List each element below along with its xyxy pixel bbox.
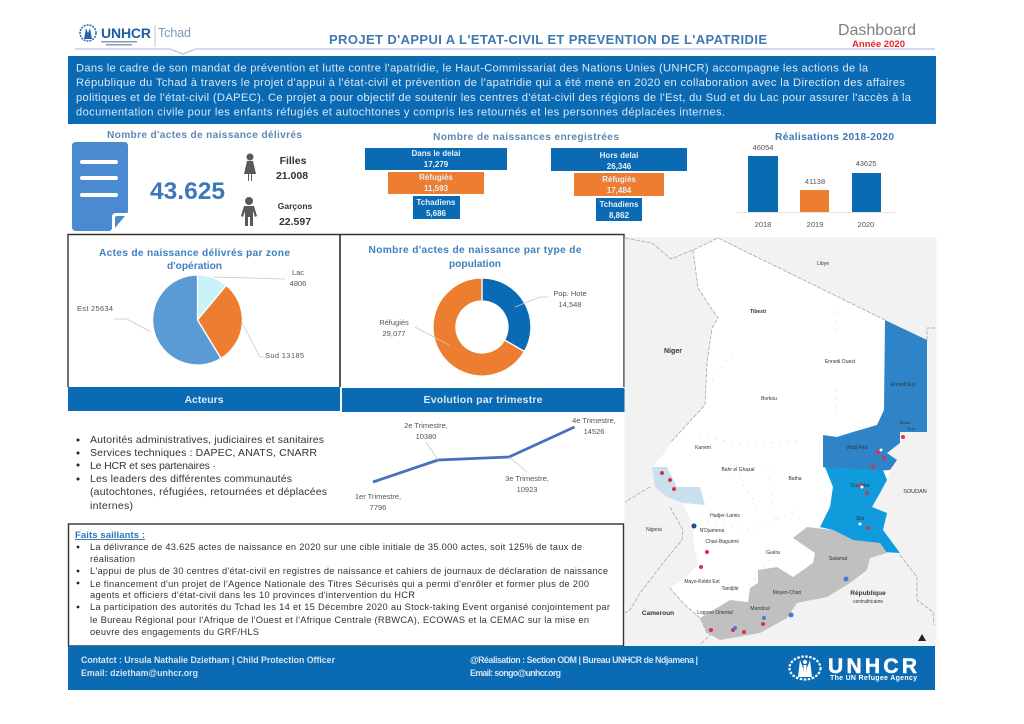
line chart: évolution par trimestre: 2e Trimestre, — [404, 421, 448, 430]
map labels: Niger — [664, 348, 682, 355]
list: acteurs: Autorités administratives, judiciaires et sanitaires — [90, 434, 324, 446]
panel: faits saillants: réalisation — [90, 554, 135, 564]
heading band: acteurs — [68, 387, 340, 411]
footer contact — [81, 655, 336, 678]
funnel: hors délai: 17,484 — [607, 186, 632, 195]
list: acteurs: Les leaders des différentes communautés — [90, 473, 292, 485]
funnel: dans le délai: 5,686 — [426, 209, 447, 218]
funnel: hors délai: 8,862 — [609, 211, 630, 220]
funnel: hors délai: Réfugiés — [602, 175, 636, 184]
region: Lac — [652, 467, 705, 505]
map labels: Bahr el Ghazal — [721, 467, 755, 473]
map labels: Libye — [817, 261, 829, 267]
dashboard label: Année 2020 — [852, 39, 905, 50]
panel: faits saillants: Le financement d'un projet de l'Agence Nationale des Titres Sécurisés qui a permi d'enrôler et former plus de 200 — [90, 579, 589, 589]
line chart: évolution par trimestre: 1er Trimestre, — [355, 492, 401, 501]
map labels: Chari-Baguirmi — [705, 539, 739, 545]
pie labels: Lac — [292, 268, 304, 277]
line chart: évolution par trimestre: 7796 — [370, 503, 386, 512]
donut chart: population — [433, 278, 531, 376]
footer credit: Email: songo@unhcr.org — [470, 668, 561, 678]
footer logo: The UN Refugee Agency — [830, 675, 917, 682]
funnel: dans le délai: Réfugiés — [419, 173, 453, 182]
header logo: UNHCR Tchad: UNHCR — [101, 25, 151, 41]
header rule — [75, 49, 935, 54]
donut labels: Pop. Hote — [553, 289, 587, 298]
header logo: UNHCR Tchad — [80, 25, 191, 47]
map labels: Batha — [788, 476, 802, 482]
heading: zones: Actes de naissance délivrés par zone — [99, 248, 290, 259]
map labels: centrafricaine — [853, 599, 883, 605]
heading: population: Nombre d'actes de naissance par type de — [368, 245, 582, 256]
map labels — [642, 261, 927, 617]
funnel: hors délai — [551, 148, 687, 221]
map labels: Guéra — [766, 550, 780, 556]
map labels: Kanem — [695, 445, 711, 451]
funnel: hors délai: Tchadiens — [600, 200, 639, 209]
line chart: évolution par trimestre — [355, 416, 616, 512]
pie leader lines — [114, 277, 285, 357]
footer logo — [790, 655, 917, 682]
pie labels — [77, 268, 306, 360]
panel: population chart — [340, 234, 624, 387]
boys count — [278, 201, 313, 228]
map labels: Sila — [856, 516, 864, 522]
line chart: évolution par trimestre: 14526 — [584, 427, 604, 436]
map labels: Salamat — [829, 556, 848, 562]
funnel: hors délai: 26,346 — [607, 162, 632, 171]
girls count: 21.008 — [276, 170, 308, 182]
footer contact: Email: dzietham@unhcr.org — [81, 668, 198, 678]
pie chart: zones — [153, 275, 242, 365]
heading: réalisations: Réalisations 2018-2020 — [775, 132, 894, 143]
girls count: Filles — [280, 155, 307, 167]
bar chart: réalisations 2018-2020: 2018 — [755, 220, 771, 229]
map labels: Borkou — [761, 396, 777, 402]
funnel: dans le délai: Tchadiens — [417, 198, 456, 207]
panel: faits saillants: oeuvre des engagements du GRF/HLS — [90, 627, 259, 637]
outer borders — [625, 238, 936, 645]
map labels: Mayo-Kebbi Est — [684, 579, 720, 585]
bar chart: réalisations 2018-2020: 43625 — [856, 159, 876, 168]
line chart: évolution par trimestre: 3e Trimestre, — [505, 474, 549, 483]
map labels: République — [850, 590, 886, 597]
bar chart: réalisations 2018-2020: 46054 — [753, 143, 773, 152]
map labels: Ennedi Est — [891, 382, 916, 388]
line chart: évolution par trimestre: 10380 — [416, 432, 436, 441]
map markers — [660, 435, 905, 634]
map labels: Nigeria — [646, 527, 662, 533]
map labels: Hadjer-Lamis — [710, 513, 740, 519]
line chart: évolution par trimestre: 4e Trimestre, — [572, 416, 616, 425]
map labels: Cameroun — [642, 610, 674, 617]
list: acteurs — [76, 434, 327, 512]
bar chart: réalisations 2018-2020: 2020 — [858, 220, 874, 229]
heading band: evolution — [342, 388, 625, 412]
region: Borkou-Ennedi-Wadi Fira — [823, 320, 927, 472]
map labels: Tibesti — [750, 309, 767, 315]
bar chart: réalisations 2018-2020 — [737, 143, 895, 229]
panel: faits saillants: Faits saillants : — [75, 530, 145, 541]
donut labels: 29,077 — [383, 329, 405, 338]
footer credit: @Réalisation : Section ODM | Bureau UNHCR de Ndjamena | — [470, 655, 698, 665]
icon: document — [72, 142, 128, 231]
funnel: dans le délai: 17,279 — [424, 160, 449, 169]
line chart: évolution par trimestre: 10923 — [517, 485, 537, 494]
panel: introduction — [68, 56, 936, 124]
map labels: Wadi Fira — [846, 445, 868, 451]
panel: introduction: Dans le cadre de son mandat de prévention et lutte contre l'apatridie, le Haut-Commissariat des Nations Unies (UNHCR) accompagne les actions de la — [76, 62, 869, 74]
panel: zones chart — [68, 234, 340, 387]
footer contact: Contatct : Ursula Nathalie Dzietham | Child Protection Officer — [81, 655, 336, 665]
panel: introduction: République du Tchad à travers le projet d'appui à l'état-civil et prévention de l'apatridie qui a été mené en 2020 en collaboration avec la Direction des affaires — [76, 77, 905, 89]
heading: zones — [99, 248, 290, 272]
donut leader lines — [415, 297, 548, 345]
header logo: UNHCR Tchad: Tchad — [158, 26, 191, 40]
panel: faits saillants: La délivrance de 43.625 actes de naissance en 2020 sur une cible initiale de 35.000 actes, soit 125% de taux de — [90, 542, 582, 552]
panel: faits saillants: agents et officiers d'état-civil dans les 10 provinces d'intervention du HCR — [90, 590, 415, 600]
dashboard label — [838, 22, 916, 50]
region: Sud — [700, 527, 887, 640]
list: acteurs: Le HCR et ses partenaires · — [90, 460, 216, 472]
total birth certificates: 43.625 — [150, 178, 225, 205]
map labels: Ouaddaï — [850, 483, 870, 489]
footer logo: UNHCR — [828, 655, 917, 678]
pie labels: Est 25634 — [77, 304, 113, 313]
map labels: Logone Oriental — [697, 610, 733, 616]
girls count — [276, 155, 308, 182]
icon: north arrow — [918, 634, 926, 641]
list: acteurs: Services techniques : DAPEC, ANATS, CNARR — [90, 447, 317, 459]
map labels: SOUDAN — [903, 489, 927, 495]
panel: faits saillants: L'appui de plus de 30 centres d'état-civil en registres de naissance et cahiers de journaux de déclaration de naissance — [90, 566, 608, 576]
heading band: acteurs: Acteurs — [184, 394, 224, 406]
funnel: hors délai: Hors delai — [600, 151, 638, 160]
icon: boy — [241, 197, 257, 226]
funnel: dans le délai: 11,593 — [424, 184, 449, 193]
boys count: 22.597 — [279, 216, 311, 228]
donut labels — [379, 289, 587, 338]
map labels: Bahaï — [900, 420, 911, 425]
pie labels: 4806 — [290, 279, 306, 288]
dashboard label: Dashboard — [838, 22, 916, 39]
icon: girl — [244, 154, 256, 181]
heading: zones: d'opération — [167, 261, 222, 272]
region: Ouaddai-Sila — [820, 467, 900, 553]
heading: population — [368, 245, 582, 270]
boys count: Garçons — [278, 201, 313, 211]
funnel: dans le délai — [365, 148, 507, 219]
panel: faits saillants — [68, 524, 624, 646]
panel: introduction: politiques et de l'état-civil (DAPEC). Ce projet a pour objectif de soutenir les centres d'état-civil des régions de l'Est, du Sud et du Lac pour assurer l'accès à la — [76, 92, 912, 104]
map labels: Ennedi Ouest — [825, 359, 856, 365]
bar chart: réalisations 2018-2020: 41138 — [805, 177, 825, 186]
map labels: Tine — [907, 426, 916, 431]
list: acteurs: (autochtones, réfugiées, retournées et déplacées — [90, 486, 327, 498]
map labels: N'Djamena — [700, 528, 725, 534]
footer credit — [470, 655, 698, 678]
heading band: evolution: Evolution par trimestre — [424, 394, 543, 406]
bar chart: réalisations 2018-2020: 2019 — [807, 220, 823, 229]
heading: population: population — [449, 259, 501, 270]
heading: actes délivrés: Nombre d'actes de naissance délivrés — [107, 130, 302, 141]
footer — [68, 646, 935, 690]
map labels: Moyen-Chari — [773, 590, 801, 596]
panel: introduction: documentation civile pour les enfants réfugiés et autochtones y compris les retournés et les personnes déplacées internes. — [76, 106, 725, 118]
map labels: Mandoul — [750, 606, 770, 612]
province boundaries — [700, 305, 838, 590]
panel: faits saillants: le Bureau Régional pour l'Afrique de l'Ouest et l'Afrique Centrale (RBWCA), ECOWAS et la CEMAC sur la mise en — [90, 615, 589, 625]
chad territory — [652, 238, 927, 640]
map labels: Tandjilé — [722, 586, 739, 592]
donut labels: Réfugiés — [379, 318, 409, 327]
funnel: dans le délai: Dans le delai — [412, 149, 460, 158]
title: PROJET D'APPUI A L'ETAT-CIVIL ET PREVENTION DE L'APATRIDIE — [329, 32, 767, 47]
list: acteurs: internes) — [90, 500, 133, 512]
donut labels: 14,548 — [559, 300, 581, 309]
map: Tchad — [624, 237, 936, 646]
panel: faits saillants: La participation des autorités du Tchad les 14 et 15 Décembre 2020 au Stock-taking Event organisé conjointement par — [90, 602, 610, 612]
pie labels: Sud 13185 — [265, 351, 304, 360]
heading: naissances enregistrées: Nombre de naissances enregistrées — [433, 132, 619, 143]
